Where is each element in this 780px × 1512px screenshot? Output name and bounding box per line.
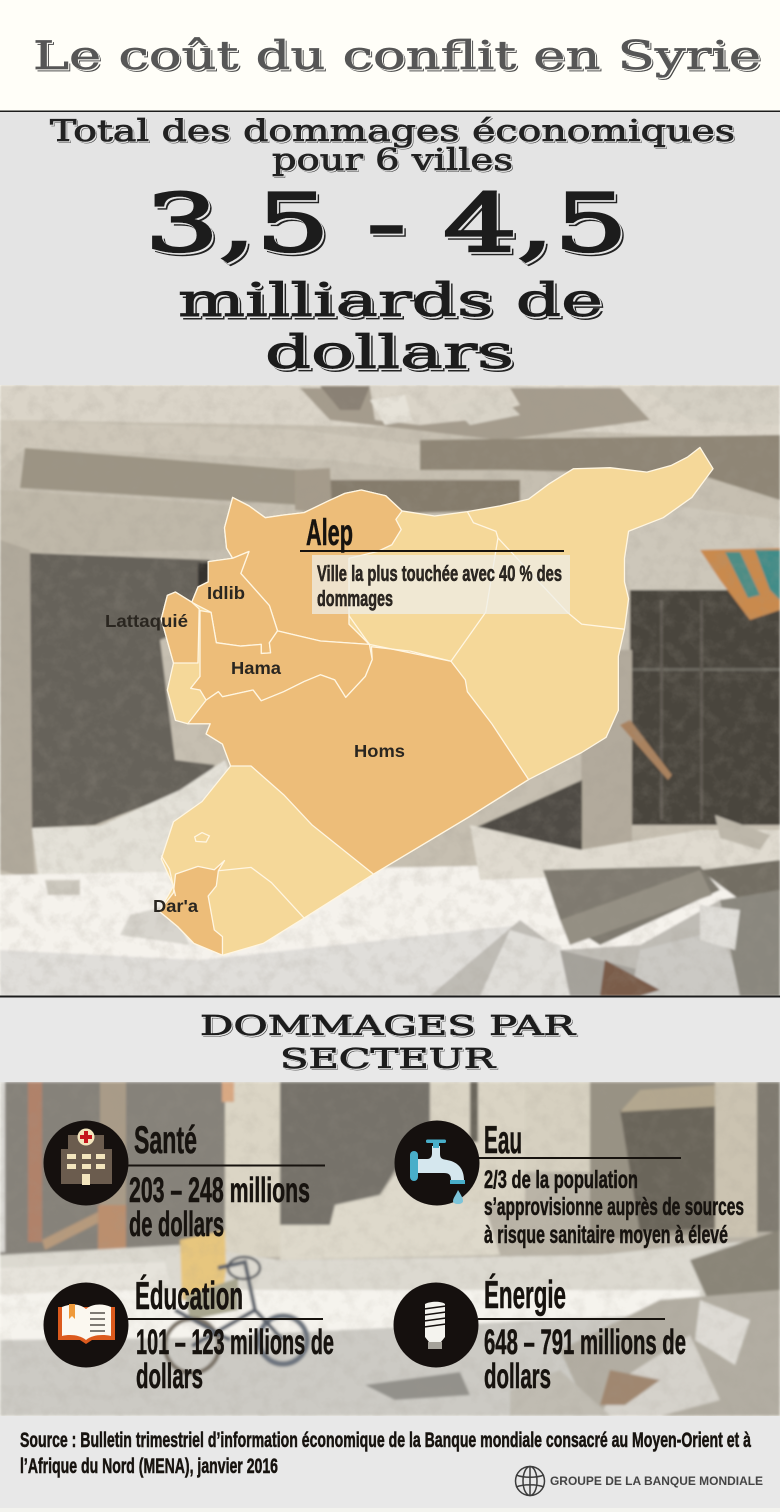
icon: light bulb [394, 1282, 478, 1368]
sector value [136, 1323, 334, 1396]
region: Idlib [192, 551, 278, 654]
callout rule [300, 550, 564, 552]
callout box [312, 555, 570, 614]
logo: World Bank Group: GROUPE DE LA BANQUE MONDIALE [550, 1474, 763, 1488]
source text: l’Afrique du Nord (MENA), janvier 2016 [20, 1455, 278, 1478]
map label: Homs: Homs [354, 741, 405, 761]
sector title: Santé [134, 1119, 197, 1162]
panel: sector heading band [0, 998, 780, 1082]
sector value: dollars [136, 1357, 203, 1396]
callout text line one: Ville la plus touchée avec 40 % des [317, 561, 562, 586]
unit line one: milliards de [178, 273, 603, 327]
sector value [129, 1171, 310, 1244]
map label: Lattaquié: Lattaquié [105, 611, 188, 631]
panel: photo of ruined building [0, 385, 780, 996]
region: Homs [188, 647, 529, 874]
heading: dommages par: DOMMAGES PAR [200, 1011, 576, 1042]
sector value [484, 1166, 744, 1249]
sector: Énergie [394, 1273, 686, 1396]
map of Syria [159, 447, 713, 955]
region: Hama [191, 611, 372, 701]
heading: secteur: SECTEUR [280, 1044, 496, 1075]
callout text line two: dommages [317, 586, 393, 611]
region: Alep [224, 490, 402, 644]
big number: 3,5 - 4,5 [145, 177, 628, 270]
sector value: dollars [484, 1357, 551, 1396]
panel: Alep callout [300, 512, 570, 614]
sector title: Éducation [135, 1274, 243, 1318]
sector value: 203 – 248 millions [129, 1171, 310, 1210]
heading: total damages: Total des dommages économiques [50, 114, 735, 149]
title: Le coût du conflit en Syrie [33, 34, 761, 79]
region: light base governorates [159, 447, 713, 955]
heading: six cities: pour 6 villes [272, 143, 513, 178]
region: Lattaquié [161, 592, 199, 663]
callout heading: Alep: Alep [306, 512, 353, 553]
logo: World Bank Group [516, 1466, 763, 1496]
unit line two: dollars [265, 325, 514, 379]
map label: Dar'a: Dar'a [153, 896, 198, 916]
sector value: de dollars [129, 1205, 224, 1244]
sector value: 2/3 de la population [484, 1166, 638, 1194]
sector: Eau [394, 1119, 744, 1249]
sector title: Eau [484, 1119, 522, 1162]
sector title: Énergie [484, 1273, 566, 1317]
icon: water tap [394, 1120, 480, 1206]
source text [20, 1429, 751, 1478]
sector value: 101 – 123 millions de [136, 1323, 334, 1362]
panel: source footer [0, 1416, 780, 1512]
sector value [484, 1323, 686, 1396]
icon: hospital [44, 1120, 128, 1206]
panel: total damages headline [0, 112, 780, 385]
icon: open book [44, 1282, 128, 1368]
region: Dar'a [159, 861, 224, 955]
panel: photo of child on bicycle [0, 1082, 780, 1416]
panel: title band [0, 0, 780, 111]
sector: Santé [44, 1119, 325, 1244]
map label: Idlib: Idlib [207, 583, 245, 603]
map label: Hama: Hama [231, 658, 281, 678]
sector: Éducation [44, 1274, 334, 1396]
